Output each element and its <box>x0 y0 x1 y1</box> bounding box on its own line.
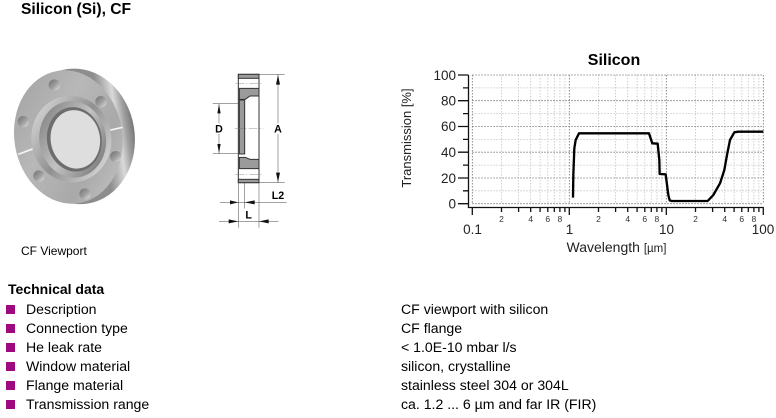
row values: ca. 1.2 ... 6 µm and far IR (FIR) <box>401 396 596 412</box>
row labels: He leak rate <box>26 339 102 355</box>
row labels: Connection type <box>26 320 128 336</box>
y axis labels: 80 <box>441 94 456 108</box>
y axis title: Transmission [%] <box>399 88 414 188</box>
outer sealing ring <box>25 90 118 188</box>
x axis minor labels: 6 <box>739 214 744 224</box>
dimension D <box>213 104 238 154</box>
x axis labels: 0.1 <box>463 222 482 237</box>
technical drawing <box>213 74 287 228</box>
dimension A <box>259 74 285 183</box>
x axis minor labels: 8 <box>558 214 563 224</box>
bolt holes <box>18 79 121 200</box>
x axis minor labels: 6 <box>545 214 550 224</box>
x axis minor labels <box>499 214 757 224</box>
x axis minor labels: 2 <box>596 214 601 224</box>
row labels: Transmission range <box>26 396 149 412</box>
y axis labels <box>433 68 456 212</box>
dimension L <box>219 183 278 228</box>
x axis labels: 1 <box>566 222 573 237</box>
x axis minor labels: 4 <box>625 214 630 224</box>
x axis minor labels: 6 <box>642 214 647 224</box>
bullets <box>6 305 15 409</box>
row values: silicon, crystalline <box>401 358 511 374</box>
middle sealing ring <box>34 96 112 182</box>
y axis labels: 0 <box>448 196 456 212</box>
x axis minor labels: 8 <box>655 214 660 224</box>
chart title: Silicon <box>588 52 640 69</box>
row values <box>401 301 596 412</box>
inner ring <box>42 103 106 176</box>
y axis labels: 40 <box>441 145 456 160</box>
row values: stainless steel 304 or 304L <box>401 377 569 393</box>
heading: technical data: Technical data <box>8 281 104 297</box>
x axis labels: 10 <box>659 222 674 237</box>
y axis labels: 100 <box>433 68 456 83</box>
x axis minor labels: 4 <box>528 214 533 224</box>
window <box>46 107 104 172</box>
dimension D: D <box>215 123 223 135</box>
x axis minor labels: 2 <box>499 214 504 224</box>
slot right <box>107 127 123 131</box>
row values: < 1.0E-10 mbar l/s <box>401 339 517 355</box>
grid <box>472 75 763 204</box>
dimension L2 <box>220 183 287 208</box>
row labels <box>26 301 149 412</box>
transmission curve <box>573 132 763 201</box>
flange rim <box>10 60 145 212</box>
y axis labels: 60 <box>441 119 456 134</box>
row labels: Flange material <box>26 377 123 393</box>
x axis minor labels: 8 <box>752 214 757 224</box>
title: Silicon (Si), CF <box>21 1 131 18</box>
axes and ticks <box>458 75 764 215</box>
x axis labels <box>463 222 774 237</box>
flange face <box>5 62 132 212</box>
row values: CF flange <box>401 320 462 336</box>
slot left <box>18 149 33 154</box>
chart: silicon transmission <box>399 52 774 255</box>
x axis title: Wavelength [µm] <box>566 239 666 255</box>
table: technical data <box>6 301 596 412</box>
image: CF viewport flange <box>5 60 145 212</box>
x axis labels: 100 <box>752 222 774 237</box>
row labels: Window material <box>26 358 130 374</box>
dimension L2: L2 <box>272 190 284 202</box>
caption: CF Viewport <box>21 244 87 258</box>
row labels: Description <box>26 301 96 317</box>
x axis minor labels: 4 <box>722 214 727 224</box>
flange section <box>235 74 263 183</box>
row values: CF viewport with silicon <box>401 301 548 317</box>
dimension A: A <box>274 124 282 136</box>
y axis labels: 20 <box>441 171 456 186</box>
x axis minor labels: 2 <box>693 214 698 224</box>
dimension L: L <box>245 210 252 222</box>
